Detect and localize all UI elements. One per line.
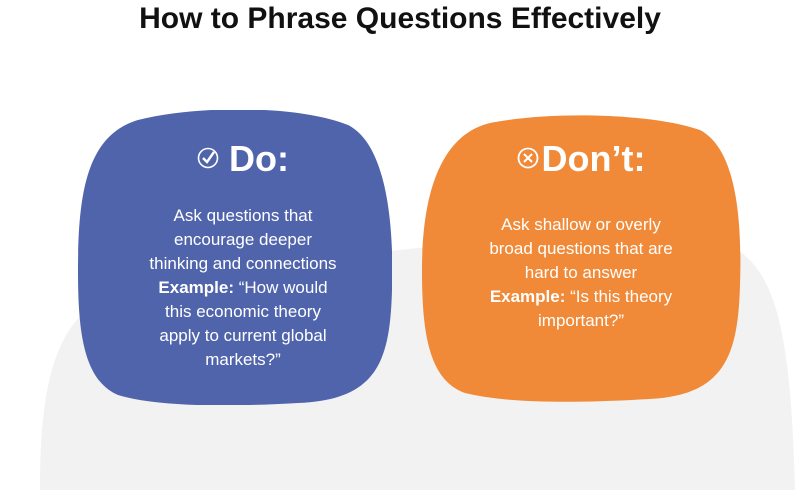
heading: do xyxy=(198,138,289,179)
heading: dont: Don’t: xyxy=(542,138,645,179)
text: dont: broad questions that are xyxy=(489,239,673,258)
text: do: apply to current global xyxy=(159,326,327,345)
panel: dont xyxy=(422,115,740,402)
text: dont xyxy=(489,215,673,330)
text: do: thinking and connections xyxy=(149,254,337,273)
text: do xyxy=(149,206,337,369)
text: dont: Example: “Is this theory xyxy=(490,287,672,306)
text: do: markets?” xyxy=(205,350,281,369)
text: dont: Ask shallow or overly xyxy=(501,215,661,234)
text: do: Example: “How would xyxy=(158,278,328,297)
text: do: this economic theory xyxy=(165,302,321,321)
text: dont: hard to answer xyxy=(525,263,637,282)
title: How to Phrase Questions Effectively xyxy=(139,2,661,35)
text: do: Ask questions that xyxy=(174,206,312,225)
text: do: encourage deeper xyxy=(174,230,312,249)
text: dont: important?” xyxy=(538,311,624,330)
heading: do: Do: xyxy=(229,138,289,179)
panel: do xyxy=(78,110,392,405)
